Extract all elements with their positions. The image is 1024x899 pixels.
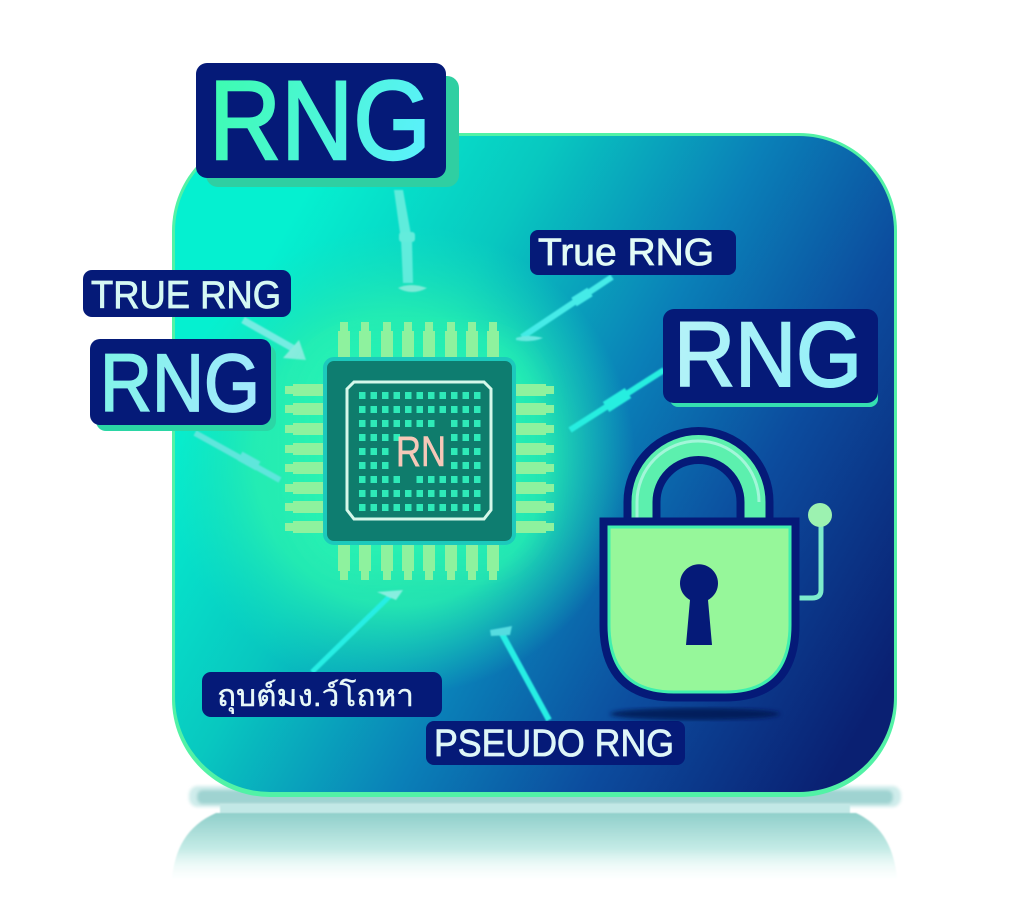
lock body [604,522,795,697]
arrow: PSEUDO RNG to chip [490,626,549,720]
arrow: RNG right to chip [570,370,664,430]
chip body [325,359,514,543]
ground shadow band [189,786,901,807]
main panel [172,133,897,797]
arrow: top RNG to chip [394,190,427,292]
chip inner frame [347,382,491,519]
arrow: RNG to chip [195,433,280,480]
label: left RNG: RNG [100,338,260,429]
label: garbled script: ถุบต์มง.ว์โถหา [217,678,414,715]
label: True RNG right: True RNG [538,232,714,274]
arrow: bottom-left label to chip [312,590,403,672]
chip glow [175,225,635,695]
arrow: TRUE RNG to chip [243,320,306,360]
label: PSEUDO RNG: PSEUDO RNG [434,723,674,765]
arrow: True RNG right to chip [516,277,612,341]
label: right RNG: RNG [674,304,862,406]
label: TRUE RNG: TRUE RNG [91,274,281,317]
lock shackle [637,441,759,530]
label: top RNG: RNG [209,58,431,183]
chip halo between pins [300,335,540,570]
lock body rim [609,527,790,692]
chip pins: top [338,322,499,358]
chip pins: right [515,384,554,533]
chip pins: bottom [338,544,499,580]
lock shadow [610,708,780,720]
chip [285,322,554,580]
circuit wire with ball [790,503,832,598]
label: garbled script [202,672,442,717]
chip dot grid [359,392,480,511]
chip pins: left [285,384,324,533]
keyhole [680,564,718,645]
panel reflection [172,804,897,878]
chip label: RN [396,428,446,476]
icon: padlock [604,441,832,720]
